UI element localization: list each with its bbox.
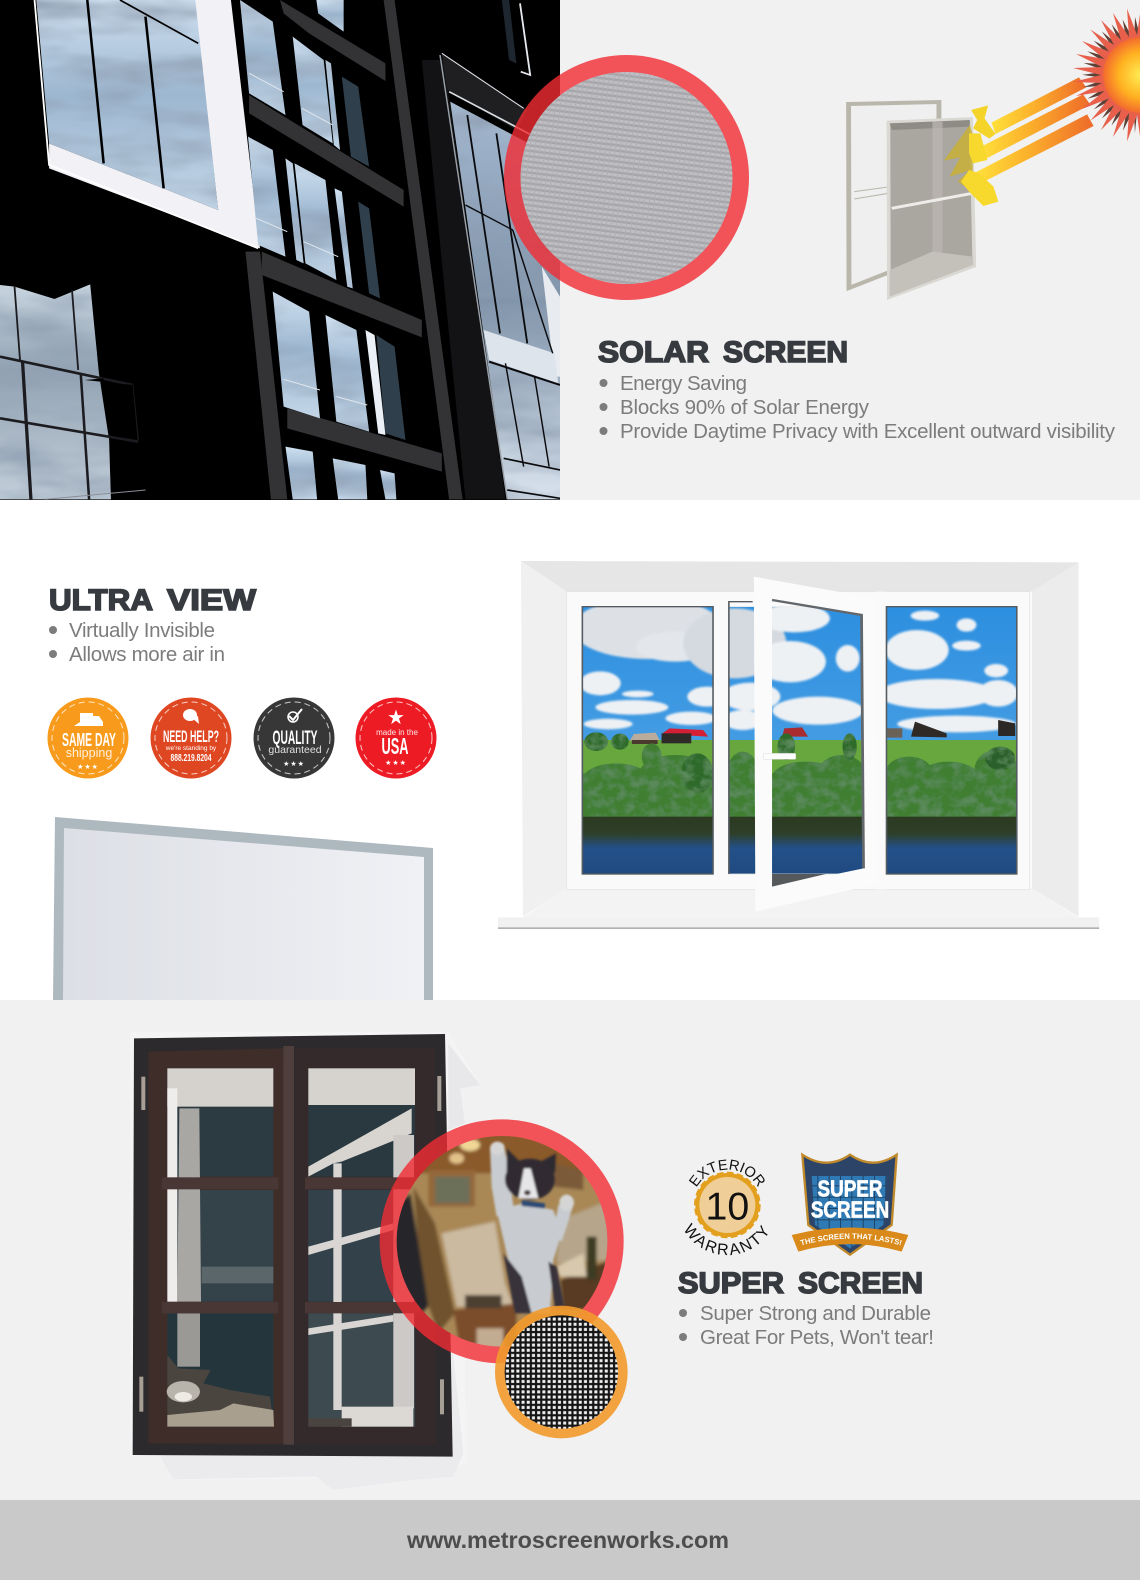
left panes	[167, 1068, 274, 1427]
badge: quality guaranteed: ★★★	[283, 760, 305, 768]
list: solar screen benefits: Blocks 90% of Solar Energy	[620, 396, 870, 419]
concrete bands and pillars	[245, 0, 463, 499]
yellow impact burst	[944, 125, 973, 192]
front screen frame	[888, 119, 974, 298]
list: super screen benefits: Great For Pets, Won't tear!	[700, 1326, 934, 1349]
badge: same day shipping: shipping	[66, 746, 112, 760]
right facade glass	[450, 102, 560, 499]
badge: made in the usa: ★	[387, 707, 405, 729]
seal: 10 year exterior warranty	[685, 1160, 768, 1256]
website url: www.metroscreenworks.com	[406, 1527, 729, 1553]
fine mesh	[63, 828, 424, 1000]
logo: super screen shield: SCREEN	[811, 1196, 889, 1222]
ribbon: THE SCREEN THAT LASTS!	[800, 1233, 902, 1246]
callout: cat behind super screen	[380, 1119, 628, 1438]
list: solar screen benefits: Energy Saving	[620, 372, 747, 395]
brick strip	[422, 60, 505, 499]
light beams	[961, 77, 1094, 206]
heading: ultra view: ULTRA	[49, 584, 153, 617]
heading: solar screen	[598, 336, 848, 369]
wall patch and shadow	[130, 1032, 480, 1490]
badge: need help	[150, 698, 232, 778]
icon: sun	[1073, 7, 1140, 143]
sleeping cat	[167, 1355, 274, 1427]
seal: 10 year exterior warranty: WARRANTY	[685, 1222, 768, 1256]
right panes	[308, 1068, 415, 1427]
middle column glass panes	[240, 0, 396, 499]
badge: need help: we're standing by	[165, 745, 217, 752]
left sash	[148, 1048, 285, 1444]
ultra view screen sample	[53, 817, 433, 1000]
cat	[490, 1142, 574, 1313]
outer frame	[133, 1034, 453, 1457]
heading: ultra view	[49, 584, 257, 617]
logo: super screen shield: SUPER	[817, 1176, 882, 1202]
badge: quality guaranteed: guaranteed	[268, 744, 322, 756]
red ring	[380, 1119, 624, 1363]
hinges	[139, 1076, 444, 1414]
solar screen mesh circle	[504, 55, 749, 300]
green hill	[583, 740, 1016, 774]
heading: super screen: SCREEN	[798, 1267, 923, 1300]
badge: need help: 888.219.8204	[170, 753, 212, 764]
horizontal muntins	[162, 1177, 420, 1313]
seal: 10 year exterior warranty: 10	[705, 1184, 749, 1228]
badge: made in the usa: made in the	[376, 728, 418, 737]
badge: same day shipping	[48, 698, 128, 778]
landscape scene	[572, 598, 1018, 874]
badge: quality guaranteed: QUALITY	[272, 728, 318, 749]
background: super screen section	[0, 1000, 1140, 1500]
aluminium frame	[53, 817, 433, 1000]
illustration: white window with landscape	[498, 561, 1099, 929]
cat photo	[393, 1133, 613, 1353]
heading: super screen: SUPER	[678, 1267, 784, 1300]
trees	[582, 732, 1018, 818]
large upper glass window	[36, 0, 218, 210]
lower left glass building	[0, 284, 111, 499]
list: solar screen benefits	[600, 372, 1116, 443]
seal: 10 year exterior warranty: EXTERIOR	[688, 1160, 765, 1187]
badge: made in the usa: USA	[382, 733, 408, 759]
list: solar screen benefits: Provide Daytime Privacy with Excellent outward visibility	[620, 420, 1116, 443]
heading: solar screen: SCREEN	[723, 336, 848, 369]
white facade panel	[49, 0, 260, 248]
heading: solar screen: SOLAR	[598, 336, 709, 369]
right sash	[295, 1048, 436, 1445]
badge: quality guaranteed	[254, 698, 334, 778]
houses	[662, 728, 708, 737]
list: ultra view benefits	[49, 619, 225, 666]
handle	[763, 753, 796, 759]
footer bar	[0, 1500, 1140, 1580]
mesh swatch	[520, 72, 732, 284]
badge: same day shipping: SAME DAY	[62, 730, 116, 750]
heading: super screen	[678, 1267, 923, 1300]
badge: need help: NEED HELP?	[163, 727, 219, 746]
list: ultra view benefits: Allows more air in	[69, 643, 225, 666]
orange mesh circle	[495, 1306, 628, 1438]
heading: ultra view: VIEW	[167, 584, 257, 617]
window frame	[567, 592, 1030, 889]
top right small window	[520, 3, 530, 75]
lake	[582, 817, 1017, 874]
list: super screen benefits	[679, 1302, 934, 1349]
overhang above right facade	[442, 53, 527, 130]
background: solar section	[560, 0, 1140, 500]
badge: same day shipping: ★★★	[77, 763, 99, 771]
open casement sash	[754, 577, 878, 912]
back window frame	[849, 102, 939, 288]
illustration: solar screen window and sun	[849, 77, 1094, 298]
logo: super screen shield	[792, 1152, 908, 1256]
badge: made in the usa: ★★★	[385, 759, 407, 767]
window reveal	[521, 561, 1079, 917]
photo: dark building facade	[0, 0, 560, 500]
badge: made in the usa	[356, 698, 436, 778]
window sill	[498, 917, 1099, 929]
red ring	[504, 55, 749, 300]
photo: wooden window with cat	[130, 1032, 480, 1490]
list: ultra view benefits: Virtually Invisible	[69, 619, 215, 642]
list: super screen benefits: Super Strong and Durable	[700, 1302, 931, 1325]
